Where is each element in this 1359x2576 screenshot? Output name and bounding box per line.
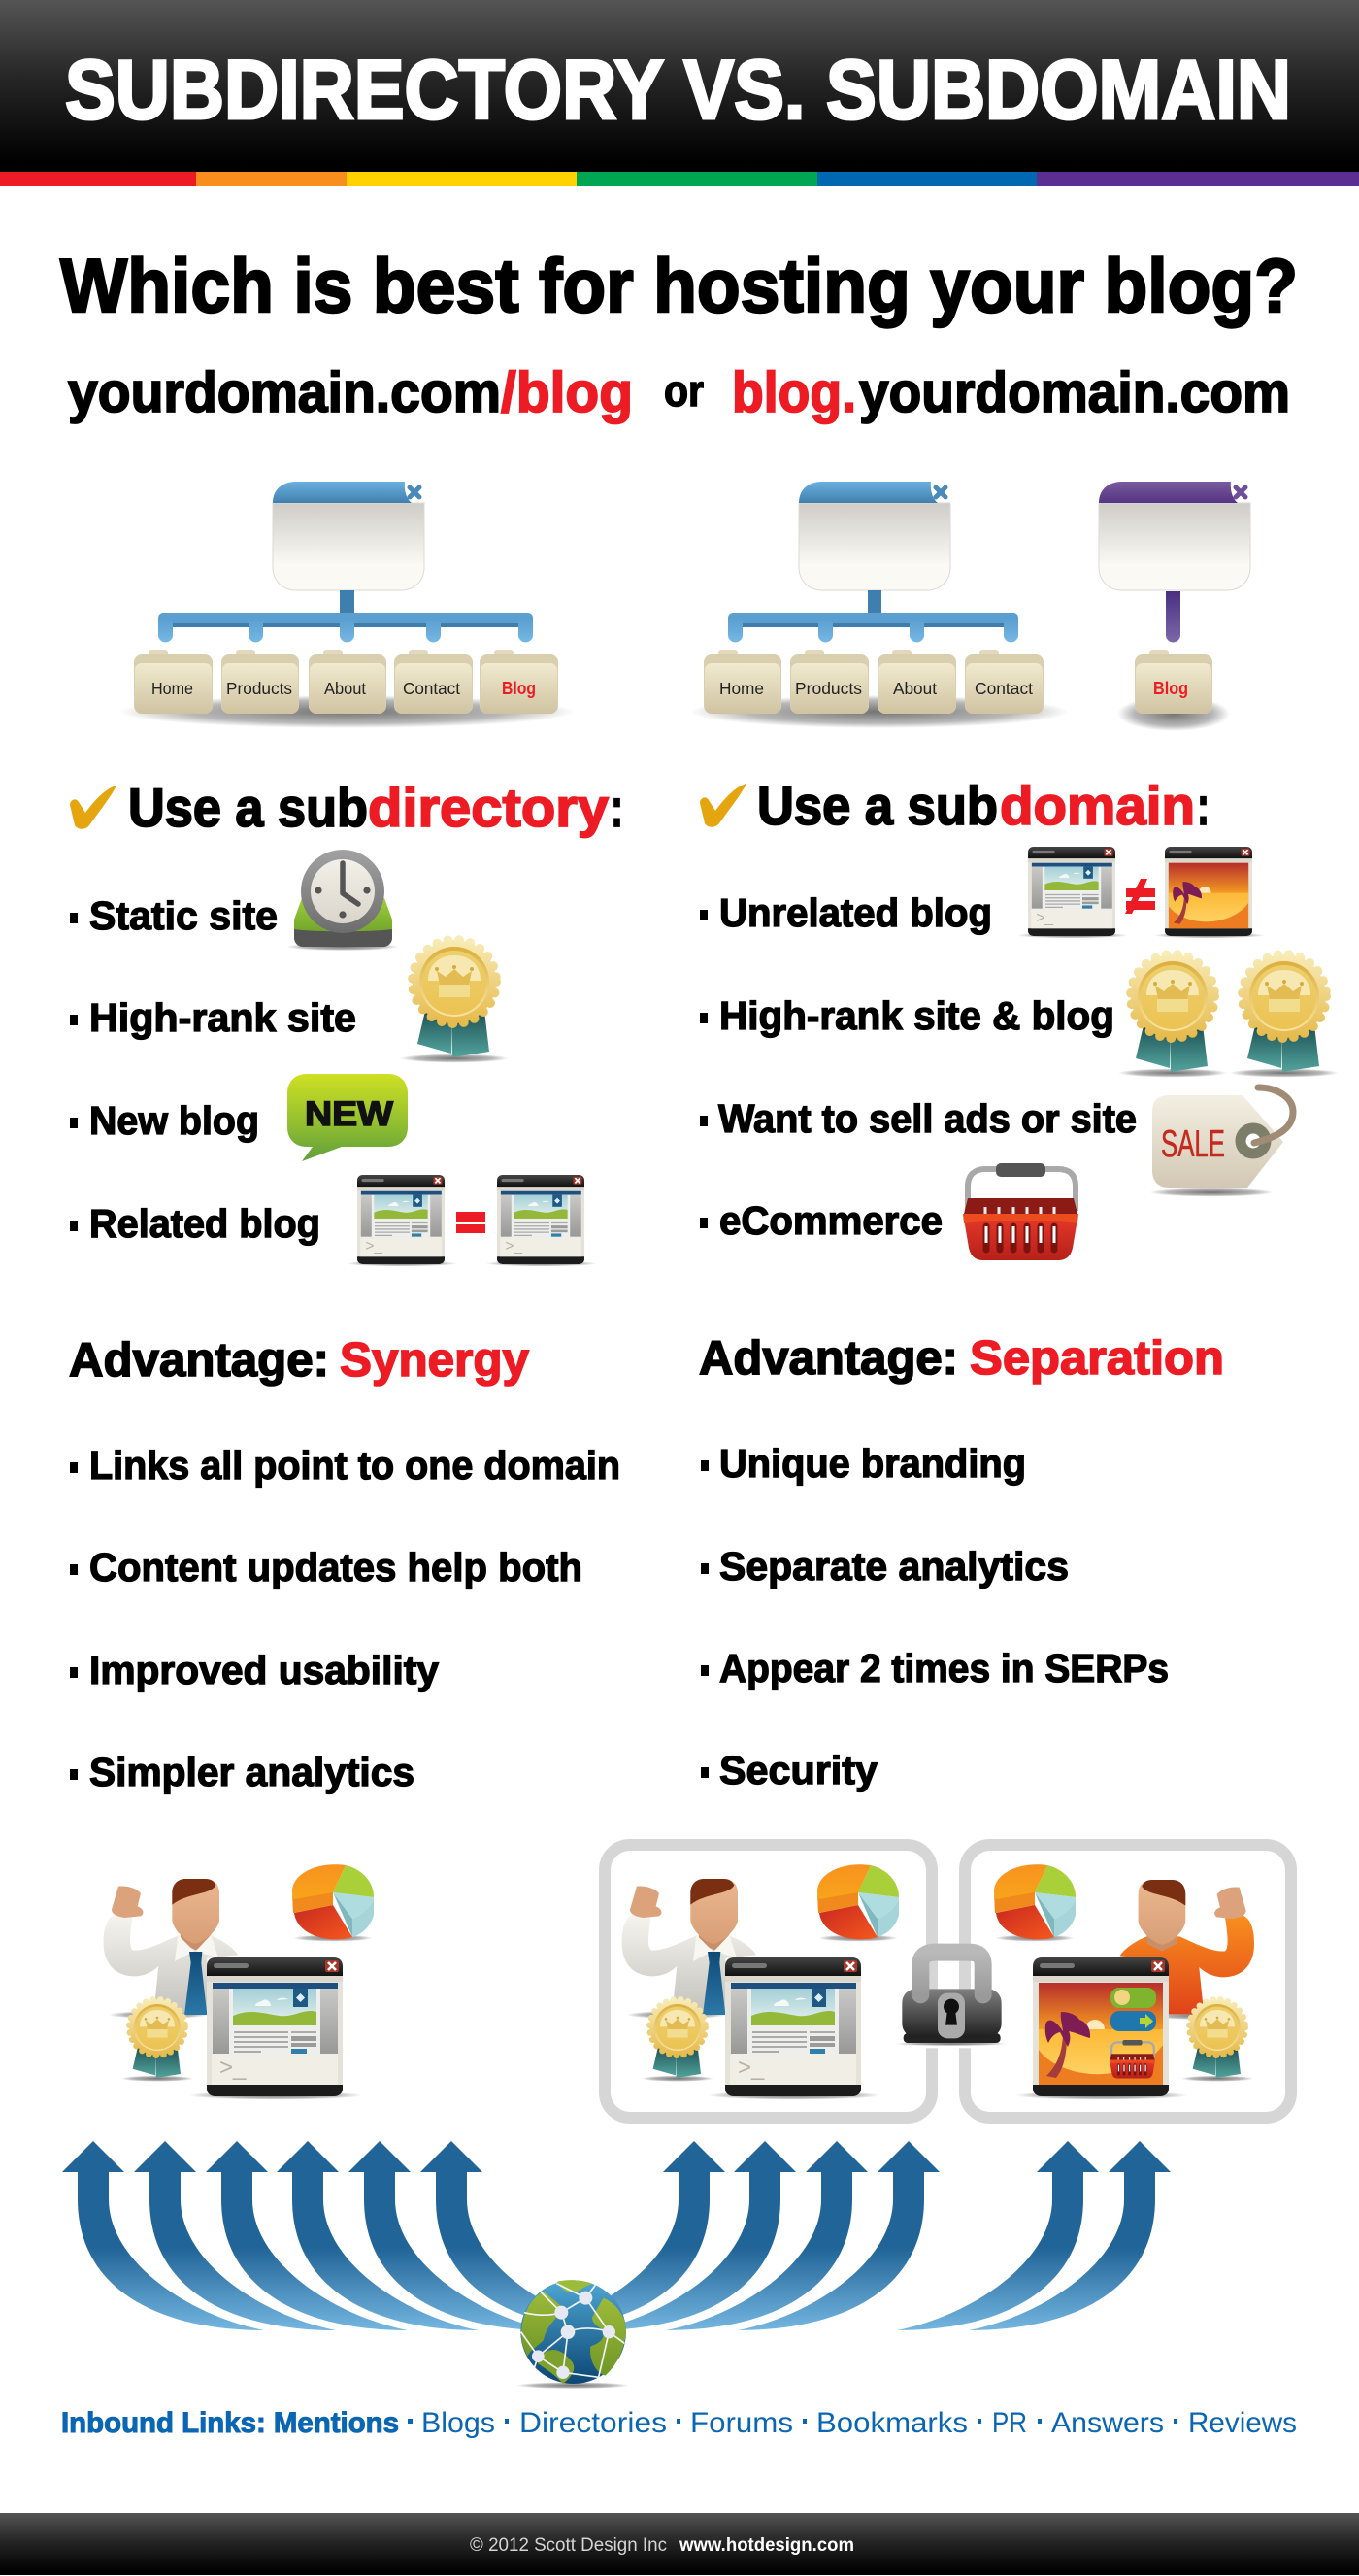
url comparison row: /blog [501, 361, 633, 424]
panel: advantage synergy [69, 1334, 620, 1794]
subtitle question: Which is best for hosting your blog? [60, 243, 1298, 328]
inbound links line: Forums [690, 2407, 793, 2439]
panel: use a subdirectory [70, 777, 623, 1266]
icon: medal [400, 940, 509, 1062]
folder: Products: Products [795, 679, 862, 698]
icon: clock [286, 850, 399, 951]
folder: Products [221, 650, 299, 714]
folder: Blog: Blog [502, 679, 536, 698]
icon: site window: >_ [738, 2055, 765, 2081]
icon: medal [642, 1999, 713, 2082]
main site window [273, 482, 424, 590]
inbound links line: PR [992, 2407, 1027, 2439]
panel: separate blog box [965, 1845, 1291, 2118]
inbound links line: Bookmarks [816, 2407, 968, 2439]
purple connector [1166, 591, 1180, 643]
folder: Products [790, 650, 869, 714]
icon: new speech bubble: NEW [305, 1095, 393, 1133]
inbound links line: Directories [519, 2407, 667, 2439]
arrows: six links to subdirectory [62, 2141, 622, 2330]
heading: use a subdirectory: : [611, 777, 623, 838]
item: static site: Static site [89, 893, 278, 938]
connector tree [158, 590, 533, 643]
rainbow stripe [0, 172, 1359, 186]
panel: use a subdomain [700, 775, 1339, 1260]
button: blue arrow [1110, 2011, 1156, 2031]
arrow [420, 2141, 622, 2330]
icon: man with tie [104, 1879, 238, 2019]
main site window [799, 482, 950, 590]
folder: Home [704, 650, 781, 714]
folder: Home: Home [151, 679, 193, 698]
item: high-rank site: High-rank site [89, 995, 356, 1040]
heading: use a subdirectory: directory [368, 777, 609, 838]
arrow [523, 2141, 725, 2330]
item: unique branding: Unique branding [719, 1441, 1026, 1486]
icon: new speech bubble [287, 1074, 408, 1161]
arrow [62, 2141, 264, 2330]
folder: Blog [480, 650, 558, 714]
heading: use a subdomain: domain [1000, 775, 1195, 836]
item: want to sell ads or site: Want to sell ads or site [718, 1096, 1137, 1141]
icon: not equal sign [1125, 879, 1155, 914]
icon: equals sign [456, 1212, 485, 1233]
url comparison row: or [664, 366, 704, 416]
heading: use a subdomain: Use a sub [757, 775, 998, 836]
copyright: © 2012 Scott Design Inc [470, 2535, 667, 2556]
folder: Home: Home [719, 679, 764, 698]
inbound links line: Inbound Links: Mentions [61, 2407, 399, 2439]
icon: sale tag [1149, 1087, 1293, 1196]
inbound links line: Reviews [1188, 2407, 1297, 2439]
icon: man with tie [622, 1879, 756, 2019]
item: improved usability: Improved usability [89, 1648, 439, 1692]
icon: check mark [700, 784, 746, 827]
website: www.hotdesign.com [679, 2535, 854, 2556]
icon: site window: >_ [1036, 910, 1053, 926]
icon: sunset blog window [1015, 1957, 1188, 2099]
folder: About [309, 650, 386, 714]
item: ecommerce: eCommerce [719, 1198, 943, 1243]
url comparison row: yourdomain.com [859, 361, 1290, 424]
icon: site window: >_ [505, 1238, 522, 1255]
icon: pie chart [292, 1864, 374, 1942]
folder: Home [134, 650, 213, 714]
item: appear 2 times in serps: Appear 2 times in SERPs [719, 1646, 1169, 1690]
icon: medal [1230, 954, 1339, 1078]
heading: use a subdirectory: Use a sub [128, 777, 368, 838]
heading: advantage separation [699, 1332, 1224, 1385]
icon: medal [1181, 1999, 1253, 2082]
item: high-rank site and blog: High-rank site & blog [719, 993, 1114, 1038]
icon: sunset blog window [1153, 847, 1265, 938]
item: links all point to one domain: Links all point to one domain [89, 1443, 620, 1488]
heading: use a subdomain: : [1197, 775, 1210, 836]
heading: advantage separation: Advantage: [699, 1332, 958, 1385]
heading: use a subdirectory [128, 777, 623, 838]
folder: About: About [324, 679, 366, 698]
folder: Contact [394, 650, 473, 714]
arrows: links to site and blog [523, 2141, 1171, 2330]
folder: Products: Products [226, 679, 292, 698]
scene: site owner with separate site [622, 1864, 899, 2099]
scene: blog owner with separate blog [994, 1864, 1254, 2099]
arrow [594, 2141, 796, 2330]
heading: advantage synergy [69, 1334, 529, 1387]
arrow [897, 2141, 1099, 2330]
arrow [969, 2141, 1171, 2330]
icon: pie chart [817, 1864, 899, 1942]
connector tree [728, 590, 1018, 643]
icon: site window [485, 1175, 597, 1266]
heading: advantage synergy: Advantage: [69, 1334, 329, 1387]
folder: Contact [965, 650, 1044, 714]
heading: use a subdomain [757, 775, 1210, 836]
folder: Contact: Contact [975, 679, 1033, 698]
scene: single site owner [104, 1864, 374, 2099]
panel: advantage separation [699, 1332, 1224, 1792]
folder: About [878, 650, 956, 714]
url comparison row [68, 361, 1290, 424]
arrow [206, 2141, 408, 2330]
blog site window [1099, 482, 1250, 590]
heading: advantage synergy: Synergy [340, 1334, 529, 1387]
diagram: subdomain site map [690, 482, 1250, 731]
arrow [134, 2141, 336, 2330]
inbound links line: Blogs [421, 2407, 495, 2439]
folder: Contact: Contact [403, 679, 460, 698]
arrow [277, 2141, 479, 2330]
diagram: subdirectory site map [118, 482, 575, 728]
icon: site window [1016, 847, 1128, 938]
icon: check mark [70, 786, 116, 829]
folder: Blog [1135, 650, 1212, 714]
icon: medal [1118, 954, 1227, 1078]
folder: Blog: Blog [1153, 679, 1188, 698]
footer bar [0, 2513, 1359, 2575]
icon: sale tag: SALE [1161, 1123, 1225, 1165]
item: separate analytics: Separate analytics [719, 1544, 1069, 1589]
icon: mini basket [1110, 2040, 1155, 2078]
button: green toggle [1110, 1988, 1156, 2008]
arrow [738, 2141, 940, 2330]
icon: man in orange shirt [1120, 1880, 1254, 2020]
icon: shopping basket [963, 1163, 1078, 1260]
inbound links line: Answers [1051, 2407, 1164, 2439]
icon: site window [189, 1957, 362, 2099]
icon: globe network [516, 2280, 629, 2389]
icon: blog window [346, 1175, 457, 1266]
inbound links line [61, 2407, 1297, 2439]
icon: pie chart [994, 1864, 1076, 1942]
arrow [666, 2141, 868, 2330]
item: security: Security [719, 1748, 878, 1792]
icon: site window [708, 1957, 880, 2099]
item: content updates help both: Content updates help both [89, 1545, 582, 1589]
icon: padlock [890, 1953, 1010, 2048]
folder: About: About [893, 679, 937, 698]
icon: medal [121, 1999, 193, 2082]
heading: advantage separation: Separation [970, 1332, 1224, 1385]
url comparison row: yourdomain.com [68, 361, 501, 424]
arrow [348, 2141, 550, 2330]
url comparison row: blog. [732, 361, 856, 424]
panel: separate site box [605, 1845, 932, 2118]
item: unrelated blog: Unrelated blog [719, 890, 992, 935]
item: simpler analytics: Simpler analytics [89, 1750, 414, 1794]
icon: blog window: >_ [365, 1238, 382, 1255]
item: related blog: Related blog [89, 1201, 320, 1246]
icon: site window: >_ [219, 2055, 247, 2081]
header banner [0, 0, 1359, 172]
item: new blog: New blog [89, 1098, 259, 1143]
